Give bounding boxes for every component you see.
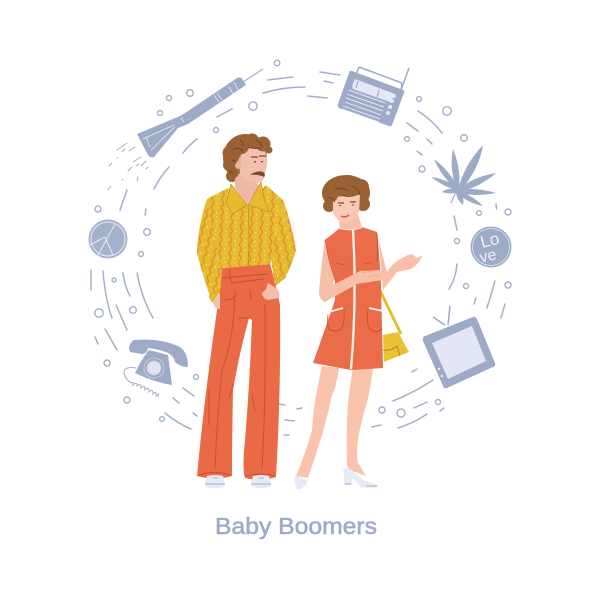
man: right sleeve [268,194,296,285]
man: shirt torso [207,185,283,268]
woman: legs [296,366,373,478]
icon: rocket [137,69,263,157]
man [197,134,296,488]
woman: yellow handbag [375,280,409,362]
icon: radio [338,67,409,126]
woman: shoes [294,468,378,489]
man: back hair [223,134,267,182]
icon: rotary telephone [124,340,188,397]
woman: back hair [322,175,370,212]
woman [294,175,423,489]
man: curly hair [222,134,272,178]
icon: love badge: ve [478,246,498,267]
woman: folded arm [319,240,384,302]
icon: love badge: Lo [478,229,501,252]
title: Baby Boomers [215,513,377,539]
man: trousers [197,264,280,480]
man: neck and head [234,148,267,205]
icon: television [423,306,495,388]
man: shirt collar [226,182,269,214]
icon: peace sign [88,220,128,258]
decorative circles and dashes ring [91,60,511,435]
woman: orange dress [313,227,383,370]
man: left sleeve [197,196,222,302]
woman: neck and head [333,195,362,229]
woman: curly fringe [324,175,369,202]
icon: cannabis leaf [431,145,496,206]
man: shoes [205,475,271,488]
woman: raised arm and hand [377,234,423,290]
icon: love badge [470,226,512,268]
man: hands [213,283,280,309]
